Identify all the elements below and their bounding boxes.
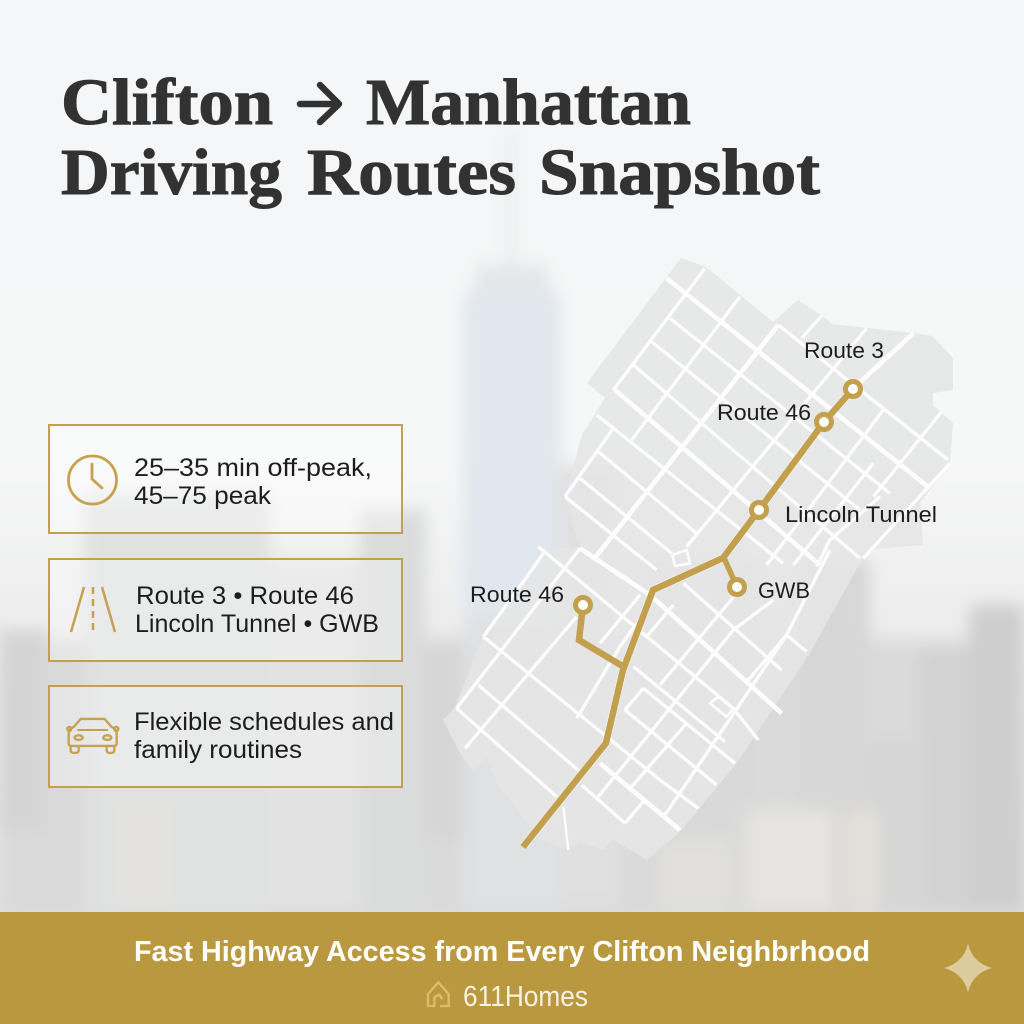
text: flexibility note: family routines (134, 736, 302, 764)
text: travel times: 25–35 min off-peak, (134, 454, 372, 482)
map labels: Route 46 (717, 400, 811, 425)
text: route list: Lincoln Tunnel • GWB (135, 610, 379, 638)
map labels (470, 338, 937, 607)
text: flexibility note: Flexible schedules and (134, 708, 394, 736)
icon: sparkle (944, 944, 992, 992)
title: Routes (307, 136, 516, 209)
map labels: Route 46 (470, 582, 564, 607)
route nodes (576, 382, 860, 612)
map labels: Route 3 (804, 338, 884, 363)
text: flexibility note (134, 708, 394, 764)
text: travel times: 45–75 peak (134, 482, 272, 510)
panel: routes (49, 559, 402, 661)
text: route list (135, 582, 379, 638)
icon: road (71, 587, 115, 632)
panel: flexibility (49, 686, 402, 787)
title: Manhattan (366, 66, 691, 139)
title: Clifton (61, 66, 273, 139)
text: route list: Route 3 • Route 46 (136, 582, 354, 610)
text: travel times (134, 454, 372, 510)
footer headline: Fast Highway Access from Every Clifton Neighbrhood (134, 936, 870, 968)
footer band (0, 912, 1024, 1024)
map labels: Lincoln Tunnel (785, 502, 937, 527)
gold driving route (523, 389, 853, 847)
icon: clock (68, 456, 116, 504)
title: Driving (61, 136, 282, 209)
brand name: 611Homes (463, 981, 588, 1013)
icon: house logo (428, 982, 449, 1006)
street map (443, 258, 953, 860)
title (61, 66, 820, 209)
title: Snapshot (539, 136, 820, 209)
panel: travel time (49, 425, 402, 533)
icon: car (67, 719, 118, 753)
map labels: GWB (758, 578, 810, 603)
